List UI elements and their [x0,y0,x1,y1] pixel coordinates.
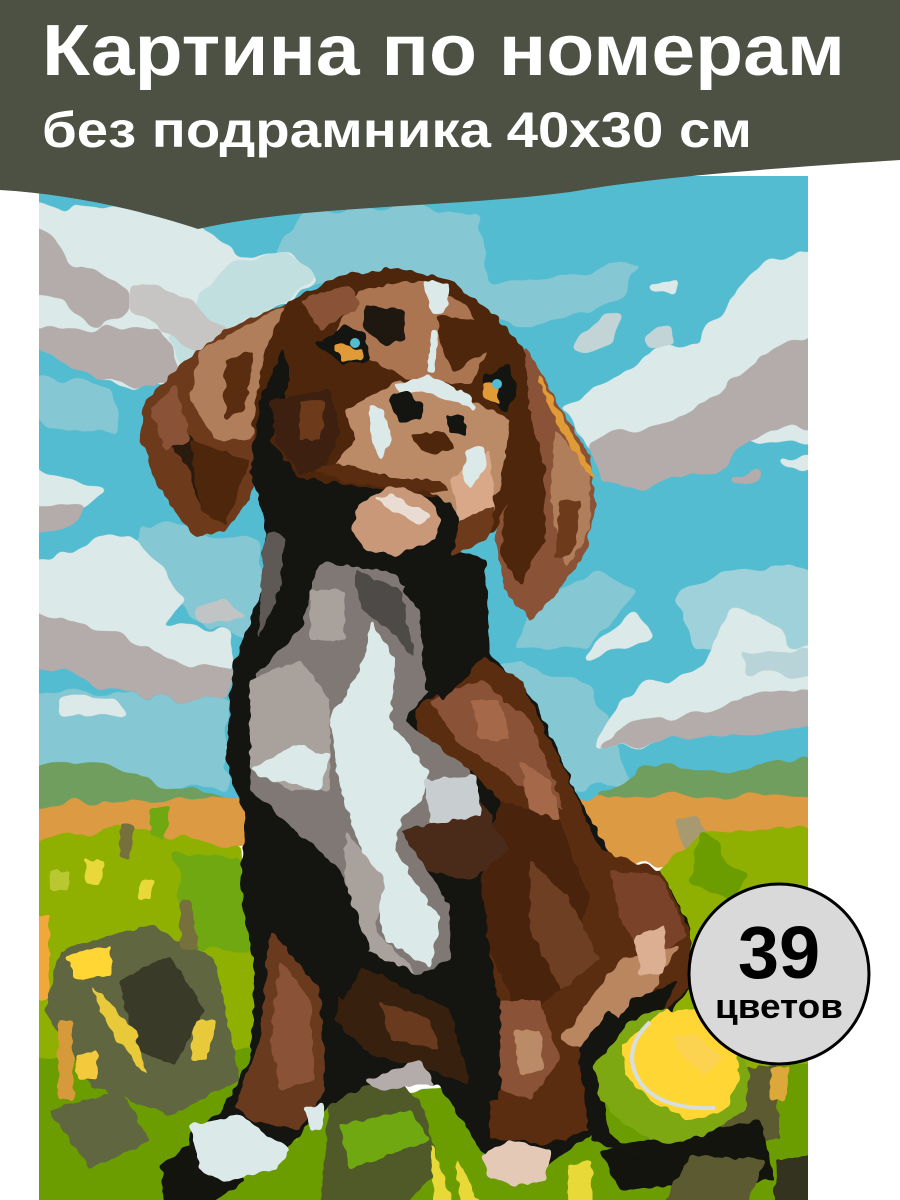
tennis ball [578,1010,750,1160]
horizon trees [39,756,808,809]
clouds [20,205,830,790]
dog [140,268,692,1185]
header banner [0,0,900,229]
ball seam [632,1022,715,1108]
painting [10,176,840,1200]
grass [10,822,840,1200]
sky [39,176,808,816]
grass details [30,805,830,1200]
badge: 39 colours: цветов [715,988,843,1026]
dog head [140,268,597,622]
title: Картина по номерам [42,11,845,91]
ball outer [578,1010,750,1160]
subtitle: без подрамника 40х30 см [42,102,752,158]
orange field [20,795,830,868]
badge: 39 colours [689,884,869,1064]
dog body [188,515,692,1185]
badge: 39 colours: 39 [738,911,820,994]
